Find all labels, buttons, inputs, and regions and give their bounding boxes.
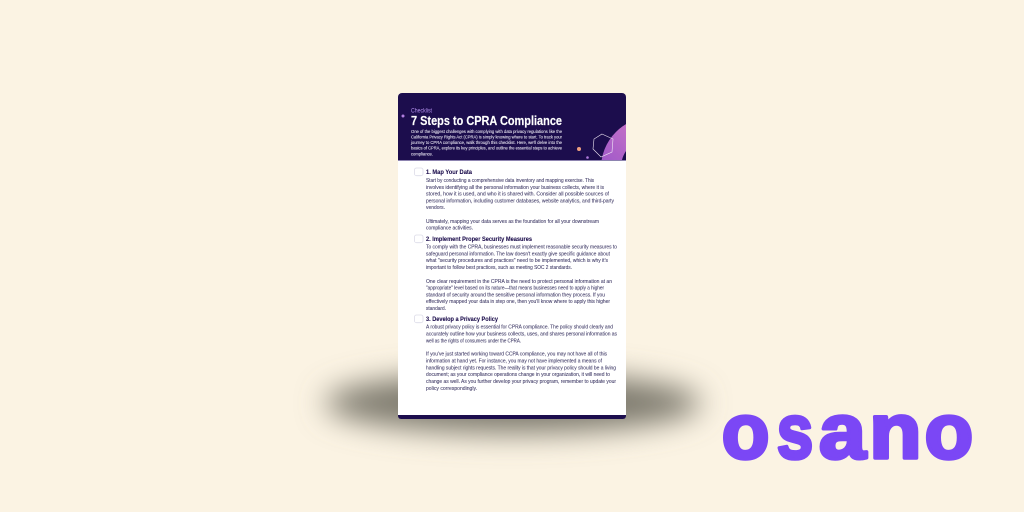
step 3 text: handling subject rights requests. The reality is that your privacy policy should be a living bbox=[426, 366, 616, 372]
step 2 text: standard of security around the sensitive personal information they process. If you bbox=[426, 292, 605, 298]
step 3 text bbox=[425, 325, 617, 392]
step 3 text: document; as your compliance operations change in your organization, it will need to bbox=[426, 372, 610, 378]
decoration: small purple dot bbox=[586, 156, 589, 159]
intro paragraph bbox=[410, 129, 562, 156]
step 2 text: One clear requirement in the CPRA is the need to protect personal information at an bbox=[426, 279, 612, 285]
step 2 text bbox=[425, 245, 617, 312]
logo: osano: a bbox=[819, 387, 867, 475]
step 3 text: If you've just started working toward CCPA compliance, you may not have all of this bbox=[426, 352, 607, 358]
step 3 text: policy correspondingly. bbox=[426, 386, 477, 392]
step 2 text: what "security procedures and practices" need to be implemented, which is why it's bbox=[425, 258, 608, 264]
eyebrow: Checklist: Checklist bbox=[411, 108, 432, 114]
intro paragraph: compliance. bbox=[411, 151, 433, 156]
step 2 text: To comply with the CPRA, businesses must implement reasonable security measures to bbox=[426, 245, 617, 251]
logo: osano: n bbox=[869, 387, 922, 475]
intro paragraph: basics of CPRA, explore its key principles, and outline the essential steps to achieve bbox=[411, 146, 562, 150]
step 1 text bbox=[426, 178, 614, 232]
logo: osano: o bbox=[925, 387, 973, 475]
step 1 text: vendors. bbox=[426, 205, 445, 211]
title: 7 Steps to CPRA Compliance bbox=[411, 113, 562, 128]
step 2: implement proper security measures bbox=[414, 235, 617, 312]
checkbox 1 bbox=[414, 168, 423, 176]
step 2 text: "appropriate" level based on its nature—that means businesses need to apply a higher bbox=[426, 286, 604, 292]
step 1: map your data bbox=[414, 168, 614, 232]
step 1 text: stored, how it is used, and who it is shared with. Consider all possible sources of bbox=[426, 192, 609, 198]
checkbox 2 bbox=[414, 235, 423, 243]
step 2 text: standard. bbox=[426, 306, 446, 312]
decoration: lilac dot bbox=[402, 114, 404, 118]
step 3 text: change as well. As you further develop your privacy program, remember to update your bbox=[426, 379, 616, 385]
step 1 text: Start by conducting a comprehensive data inventory and mapping exercise. This bbox=[426, 178, 594, 184]
decoration: purple ring bbox=[602, 124, 626, 160]
decoration: orange dot bbox=[577, 147, 581, 151]
drop shadow under document bbox=[325, 373, 701, 433]
logo: osano: o bbox=[722, 387, 769, 475]
step 1 text: compliance activities. bbox=[426, 226, 473, 232]
step 1 text: Ultimately, mapping your data serves as the foundation for all your downstream bbox=[426, 219, 599, 225]
step 1 heading: 1. Map Your Data bbox=[426, 169, 473, 176]
step 3 text: well as the rights of consumers under the CPRA. bbox=[425, 338, 521, 344]
step 3 heading: 3. Develop a Privacy Policy bbox=[426, 316, 499, 323]
step 3: develop a privacy policy bbox=[414, 315, 617, 392]
step 2 heading: 2. Implement Proper Security Measures bbox=[426, 236, 533, 243]
logo: osano bbox=[722, 387, 973, 475]
step 3 text: accurately outline how your business collects, uses, and shares personal information as bbox=[426, 332, 617, 338]
step 3 text: information at hand yet. For instance, you may not have implemented a means of bbox=[426, 358, 602, 364]
step 2 text: safeguard personal information. The law doesn't exactly give specific guidance about bbox=[426, 251, 610, 257]
panel: checklist document bbox=[398, 93, 626, 419]
intro paragraph: journey to CPRA compliance, walk through this checklist. Here, we'll delve into the bbox=[410, 140, 562, 145]
step 1 text: involves identifying all the personal information your business collects, where it is bbox=[426, 185, 604, 191]
step 3 text: A robust privacy policy is essential for CPRA compliance. The policy should clearly and bbox=[426, 325, 613, 331]
intro paragraph: One of the biggest challenges with complying with data privacy regulations like the bbox=[411, 129, 562, 134]
panel: dark header bbox=[398, 93, 626, 161]
step 2 text: important to follow best practices, such as meeting SOC 2 standards. bbox=[426, 265, 572, 271]
decoration: outlined hexagon bbox=[593, 134, 613, 157]
checkbox 3 bbox=[414, 315, 423, 323]
step 1 text: personal information, including customer databases, website analytics, and third-party bbox=[426, 198, 614, 204]
intro paragraph: California Privacy Rights Act (CPRA) is simply knowing where to start. To track your bbox=[411, 135, 562, 140]
step 2 text: effectively mapped your data in step one, then you'll know where to apply this higher bbox=[426, 299, 610, 305]
dark footer bar bbox=[398, 415, 626, 419]
logo: osano: s bbox=[777, 387, 813, 475]
